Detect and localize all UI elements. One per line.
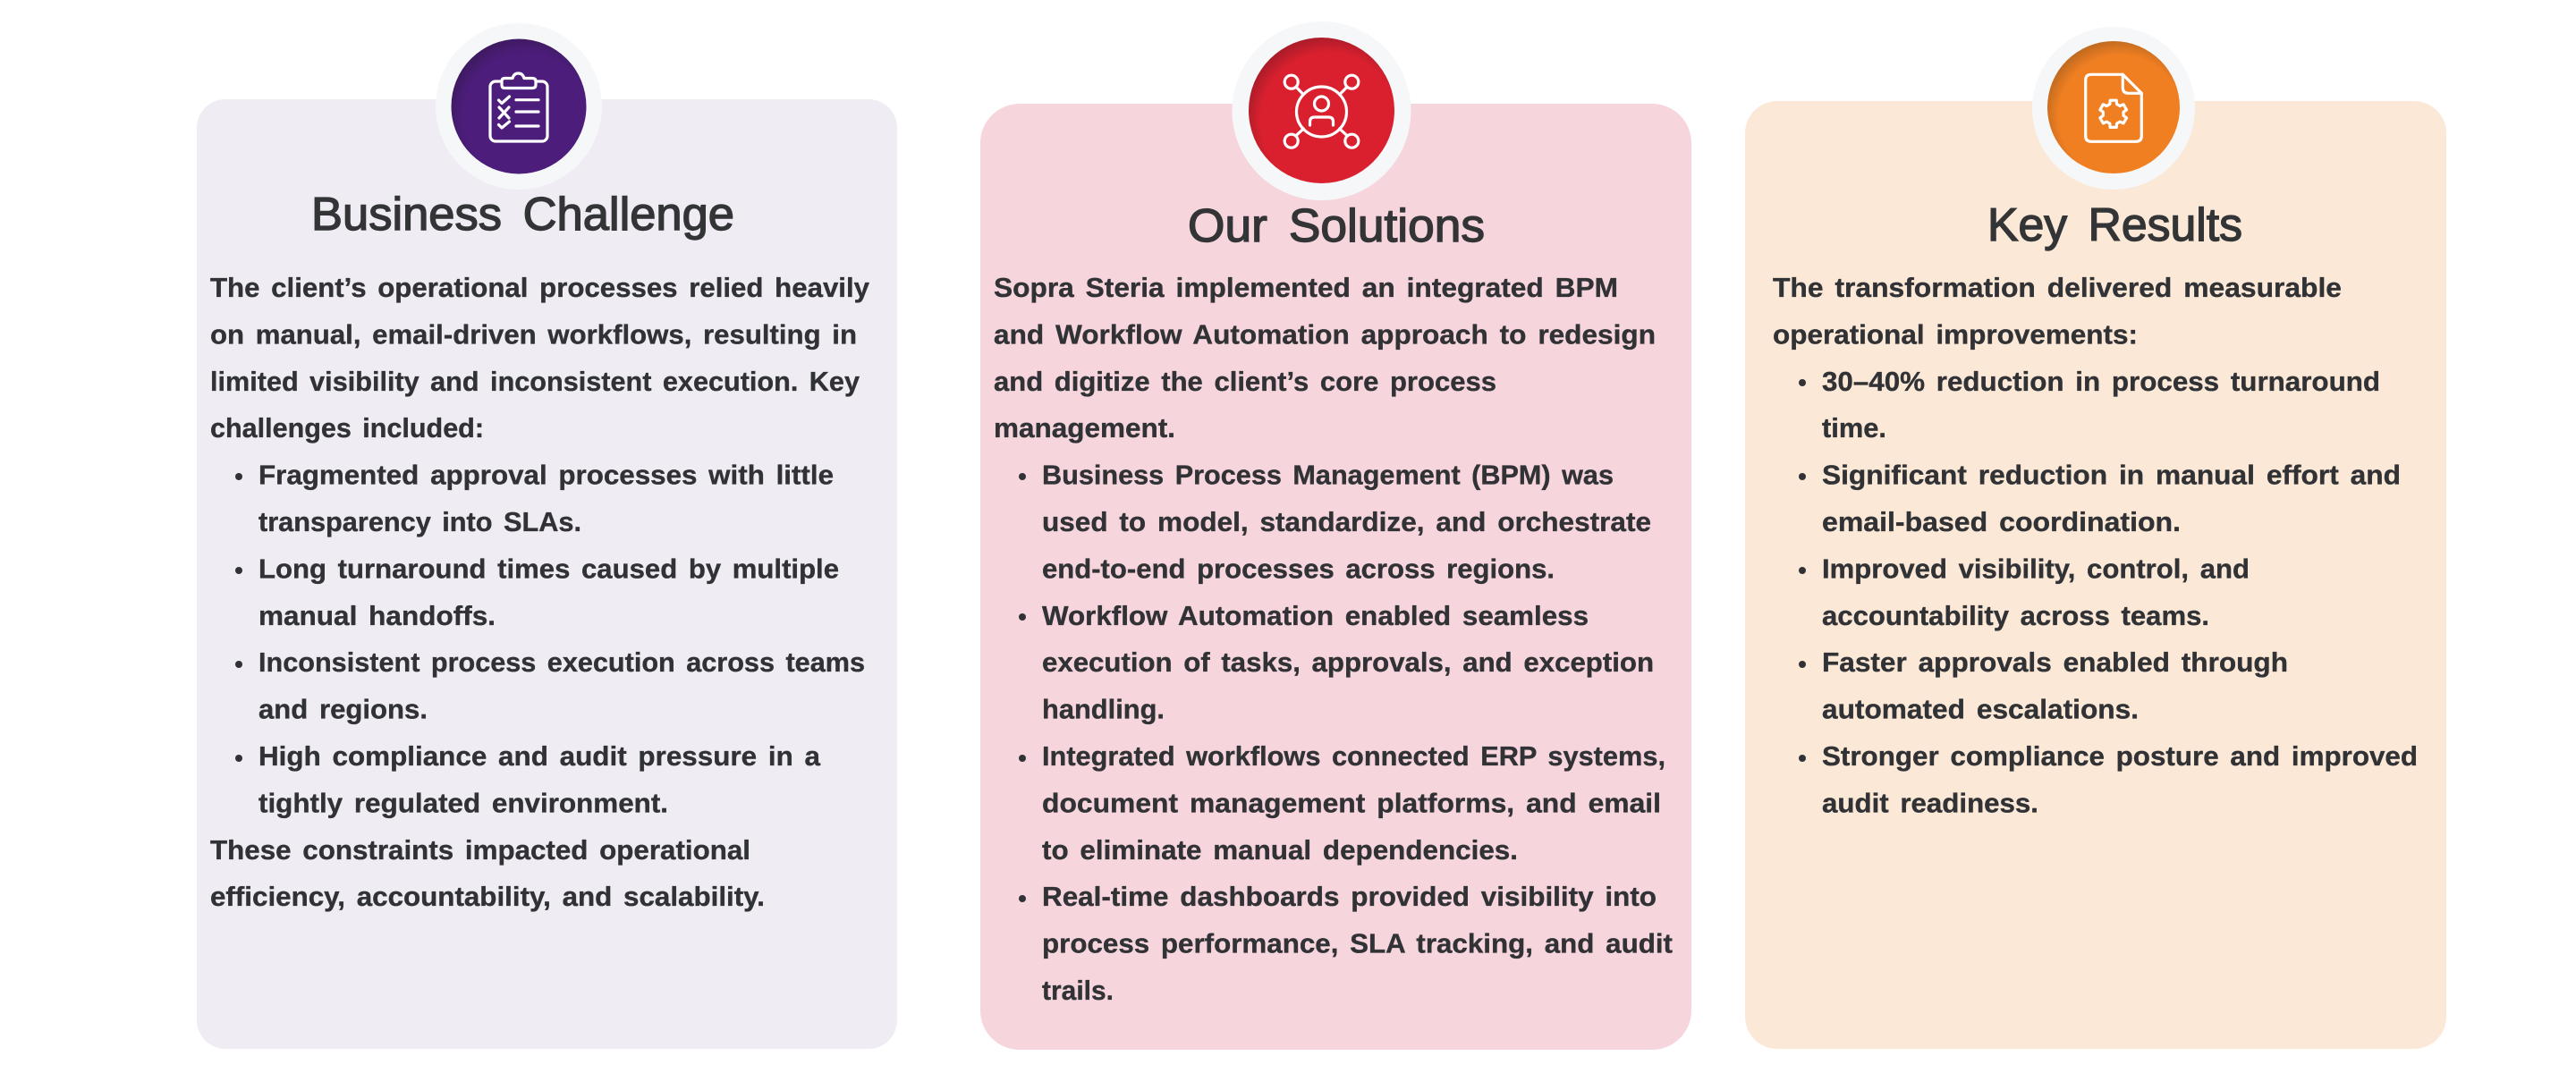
text block: closing: [210, 834, 765, 912]
text block: intro: [210, 272, 870, 444]
bullet list: solutions: Integrated workflows connected ERP systems,: [1042, 740, 1665, 772]
text block: closing: These constraints impacted operational: [210, 834, 750, 866]
text block: intro: The client’s operational processes relied heavily: [210, 272, 870, 303]
bullet list: results: Significant reduction in manual effort and: [1822, 460, 2401, 491]
text block: intro: and Workflow Automation approach to redesign: [994, 318, 1656, 350]
bullet list: results: time.: [1822, 412, 1886, 444]
bullet list: challenges: transparency into SLAs.: [258, 506, 581, 537]
icon: connected user network: [1233, 21, 1411, 200]
bullet list: results: audit readiness.: [1822, 787, 2038, 818]
bullet list: solutions: execution of tasks, approvals, and exception: [1042, 646, 1654, 678]
bullet list: solutions: used to model, standardize, and orchestrate: [1042, 506, 1651, 537]
text block: intro: and digitize the client’s core process: [994, 366, 1496, 397]
bullet list: results: automated escalations.: [1822, 694, 2139, 725]
bullet list: results: 30–40% reduction in process turnaround: [1822, 366, 2380, 397]
bullet list: results: Improved visibility, control, and: [1822, 553, 2250, 584]
bullet list: solutions: trails.: [1042, 975, 1114, 1006]
bullet list: solutions: to eliminate manual dependencies.: [1042, 834, 1518, 866]
icon: clipboard checklist: [436, 23, 602, 190]
bullet list: solutions: [1019, 460, 1673, 1006]
icon: document with gear: [2032, 27, 2195, 190]
bullet list: solutions: process performance, SLA tracking, and audit: [1042, 928, 1673, 959]
bullet list: challenges: Inconsistent process execution across teams: [258, 646, 865, 678]
bullet list: results: accountability across teams.: [1822, 600, 2209, 631]
text block: intro: [1773, 272, 2342, 350]
heading: Key Results: Key Results: [1987, 199, 2242, 251]
bullet list: results: [1799, 366, 2418, 818]
text block: intro: operational improvements:: [1773, 318, 2138, 350]
bullet list: challenges: [235, 460, 865, 818]
text block: intro: Sopra Steria implemented an integrated BPM: [994, 272, 1618, 303]
bullet list: challenges: Fragmented approval processes with little: [258, 460, 834, 491]
text block: intro: The transformation delivered measurable: [1773, 272, 2342, 303]
bullet list: challenges: High compliance and audit pressure in a: [258, 740, 821, 772]
text block: intro: on manual, email-driven workflows, resulting in: [210, 318, 857, 350]
bullet list: results: email-based coordination.: [1822, 506, 2181, 537]
text block: closing: efficiency, accountability, and scalability.: [210, 881, 765, 912]
panel: Our Solutions: [980, 21, 1691, 1050]
bullet list: challenges: manual handoffs.: [258, 600, 496, 631]
panel: Key Results: [1745, 27, 2446, 1049]
bullet list: challenges: Long turnaround times caused by multiple: [258, 553, 839, 584]
bullet list: solutions: Business Process Management (BPM) was: [1042, 460, 1614, 491]
bullet list: challenges: tightly regulated environment.: [258, 787, 668, 818]
text block: intro: challenges included:: [210, 412, 484, 444]
bullet list: challenges: and regions.: [258, 694, 428, 725]
text block: intro: limited visibility and inconsistent execution. Key: [210, 366, 860, 397]
bullet list: solutions: handling.: [1042, 694, 1165, 725]
text block: intro: management.: [994, 412, 1175, 444]
bullet list: results: Faster approvals enabled through: [1822, 646, 2288, 678]
bullet list: results: Stronger compliance posture and improved: [1822, 740, 2418, 772]
bullet list: solutions: Workflow Automation enabled seamless: [1042, 600, 1589, 631]
text block: intro: [994, 272, 1656, 444]
card background: [980, 104, 1691, 1050]
bullet list: solutions: Real-time dashboards provided visibility into: [1042, 881, 1657, 912]
card background: [197, 99, 897, 1049]
bullet list: solutions: end-to-end processes across regions.: [1042, 553, 1555, 584]
heading: Our Solutions: Our Solutions: [1188, 200, 1485, 252]
card background: [1745, 101, 2446, 1049]
bullet list: solutions: document management platforms, and email: [1042, 787, 1661, 818]
panel: Business Challenge: [197, 23, 897, 1049]
heading: Business Challenge: Business Challenge: [311, 189, 734, 241]
